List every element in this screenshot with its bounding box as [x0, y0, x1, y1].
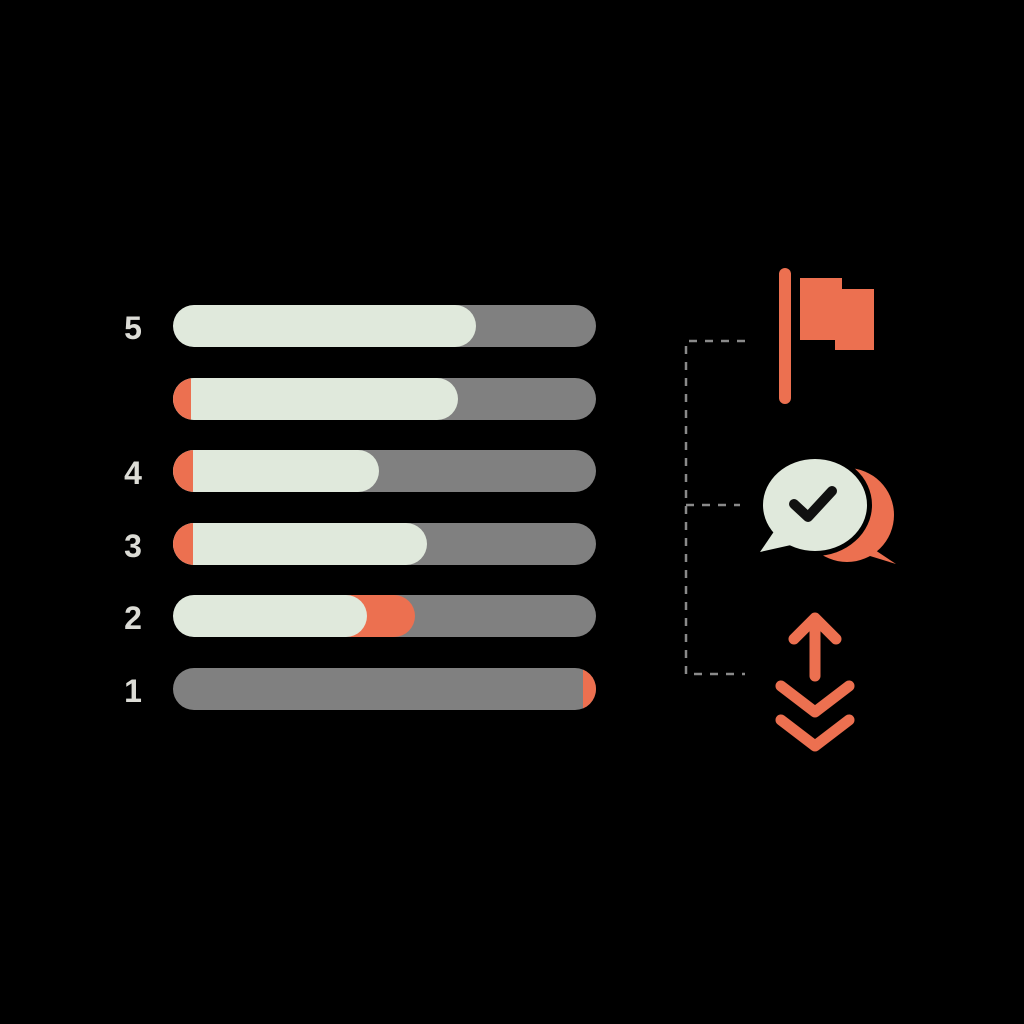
label: 5: 5	[124, 310, 142, 346]
connector: dashed bracket	[686, 341, 745, 674]
bar 2	[173, 595, 596, 637]
chart: progress bars	[173, 268, 896, 752]
bar 1	[173, 668, 596, 710]
bar 4	[150, 450, 596, 492]
label: 2: 2	[124, 600, 142, 636]
icon: chat bubbles with check	[758, 454, 896, 564]
label: 1: 1	[124, 673, 142, 709]
label: 4: 4	[124, 455, 142, 491]
icon: flag	[779, 268, 874, 404]
icon: up arrow and double chevron down	[781, 618, 849, 746]
bar unlabeled	[150, 378, 596, 420]
bar 5	[173, 305, 596, 347]
bar 3	[150, 523, 596, 565]
label: 3: 3	[124, 528, 142, 564]
